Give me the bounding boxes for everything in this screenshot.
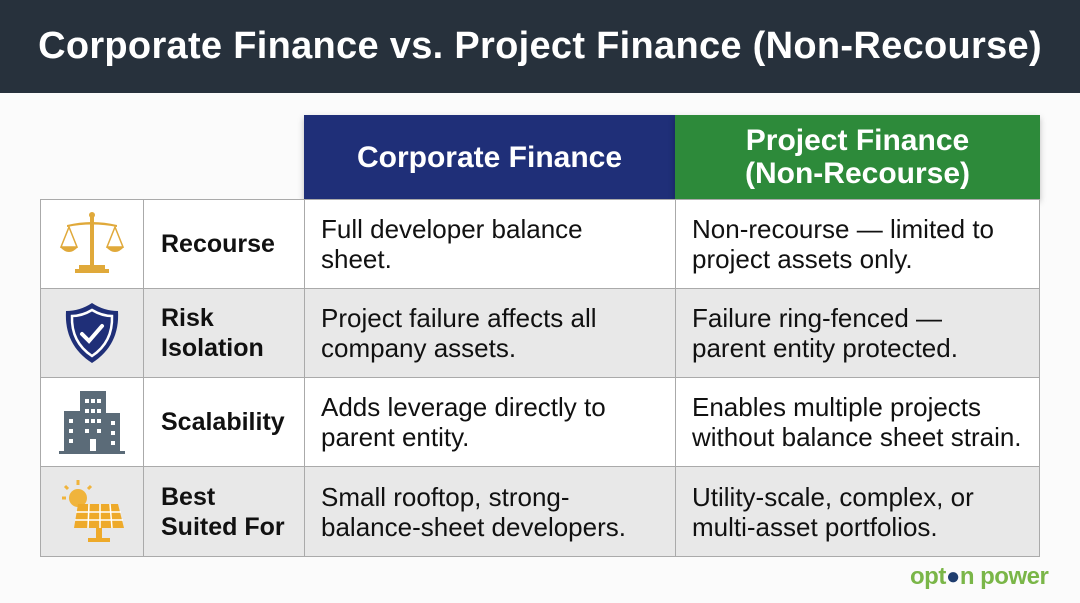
icon: solar panel: [41, 467, 144, 556]
label: [144, 378, 305, 466]
label: [144, 200, 305, 288]
row: recourse: [41, 200, 1039, 289]
label: Risk: [161, 304, 214, 332]
row: scalability: parent entity.: [321, 422, 469, 452]
icon: scales: [41, 200, 144, 288]
label: Scalability: [161, 408, 285, 436]
row: recourse: sheet.: [321, 244, 392, 274]
row: scalability: Adds leverage directly to: [321, 392, 606, 422]
icon: building: [41, 378, 144, 466]
label: [144, 467, 305, 556]
comparison table: [40, 199, 1040, 557]
column header: corporate finance: [304, 115, 675, 199]
label: Best: [161, 482, 215, 510]
logo: opt●n power: [910, 563, 1048, 590]
row: best suited for: [41, 467, 1039, 556]
column header: project finance: [675, 115, 1040, 199]
row: risk isolation: Project failure affects all: [321, 303, 597, 333]
title: [0, 0, 1080, 93]
column header: project finance: Project Finance: [746, 124, 969, 157]
row: recourse: Full developer balance: [321, 214, 583, 244]
row: recourse: project assets only.: [692, 244, 913, 274]
label: Suited For: [161, 512, 285, 540]
row: scalability: without balance sheet strain.: [692, 422, 1022, 452]
label: Recourse: [161, 230, 275, 258]
label: Isolation: [161, 334, 264, 362]
row: recourse: Non-recourse — limited to: [692, 214, 994, 244]
title: Corporate Finance vs. Project Finance (Non-Recourse): [38, 25, 1042, 67]
row: best suited for: Small rooftop, strong-: [321, 482, 570, 512]
row: scalability: Enables multiple projects: [692, 392, 981, 422]
row: risk isolation: [41, 289, 1039, 378]
column header: corporate finance: Corporate Finance: [357, 140, 622, 174]
icon: shield: [41, 289, 144, 377]
column header: project finance: (Non-Recourse): [745, 157, 970, 190]
row: best suited for: multi-asset portfolios.: [692, 512, 938, 542]
row: risk isolation: company assets.: [321, 333, 516, 363]
row: risk isolation: parent entity protected.: [692, 333, 958, 363]
row: best suited for: Utility-scale, complex, or: [692, 482, 974, 512]
label: [144, 289, 305, 377]
row: scalability: [41, 378, 1039, 467]
row: risk isolation: Failure ring-fenced —: [692, 303, 942, 333]
row: best suited for: balance-sheet developers.: [321, 512, 626, 542]
